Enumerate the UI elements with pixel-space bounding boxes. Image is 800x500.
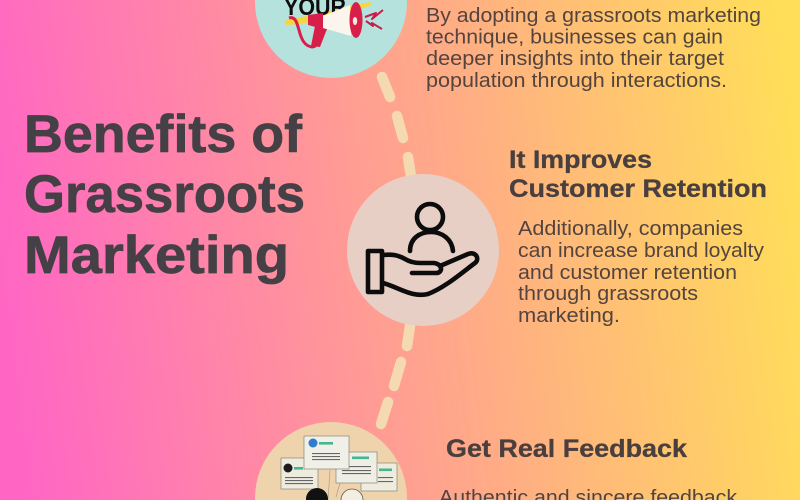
text block: insights: deeper insights into their target xyxy=(426,48,724,70)
heading: customer retention: Customer Retention xyxy=(509,175,767,203)
heading: customer retention xyxy=(509,146,767,203)
text block: retention: Additionally, companies xyxy=(518,218,743,240)
text block: insights xyxy=(426,5,761,92)
icon: customer feedback circle xyxy=(255,422,407,500)
text block: retention: marketing. xyxy=(518,305,620,327)
text block: retention xyxy=(518,218,764,327)
people xyxy=(306,488,328,500)
title: Marketing xyxy=(24,226,289,285)
text block: insights: population through interactions. xyxy=(426,70,727,92)
text block: insights: technique, businesses can gain xyxy=(426,26,723,48)
text block: retention: can increase brand loyalty xyxy=(518,240,764,262)
title xyxy=(24,105,305,285)
title: Benefits of xyxy=(24,105,302,164)
text block: retention: and customer retention xyxy=(518,262,737,284)
text block: insights: By adopting a grassroots marketing xyxy=(426,5,761,27)
feedback card left xyxy=(281,458,318,489)
icon: hand holding person circle xyxy=(347,174,499,326)
text block: retention: through grassroots xyxy=(518,283,698,305)
heading: real feedback: Get Real Feedback xyxy=(446,435,687,463)
icon: megaphone circle xyxy=(255,0,407,78)
title: Grassroots xyxy=(24,165,305,224)
heading: customer retention: It Improves xyxy=(509,146,652,174)
feedback card right xyxy=(361,463,397,491)
feedback card top xyxy=(304,436,349,469)
feedback card centre xyxy=(336,452,377,483)
dashed connector path xyxy=(381,77,411,424)
